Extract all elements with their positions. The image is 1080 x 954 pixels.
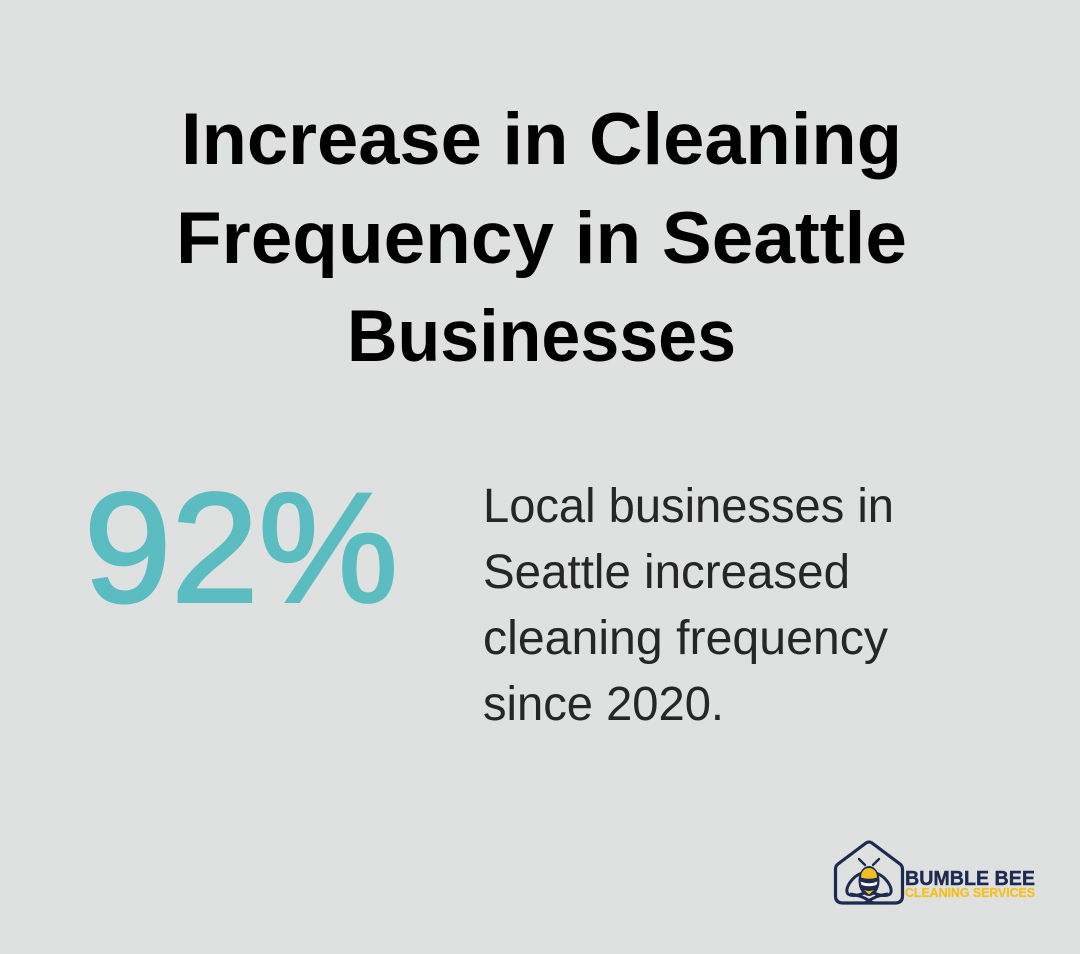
description text: Seattle increased bbox=[483, 546, 850, 599]
statistic: 92%: 92% bbox=[84, 462, 398, 636]
title bbox=[176, 99, 907, 377]
logo tagline: CLEANING SERVICES bbox=[905, 886, 1035, 900]
description text: Local businesses in bbox=[483, 480, 894, 533]
description text bbox=[483, 480, 894, 731]
title: Increase in Cleaning bbox=[181, 99, 902, 180]
logo: Bumble Bee Cleaning Services bbox=[836, 842, 1035, 903]
icon: house outline with bee bbox=[836, 842, 902, 903]
description text: since 2020. bbox=[483, 678, 724, 731]
title: Frequency in Seattle bbox=[176, 198, 907, 279]
logo wordmark: BUMBLE BEE bbox=[905, 867, 1035, 890]
description text: cleaning frequency bbox=[483, 612, 888, 665]
title: Businesses bbox=[347, 296, 736, 377]
